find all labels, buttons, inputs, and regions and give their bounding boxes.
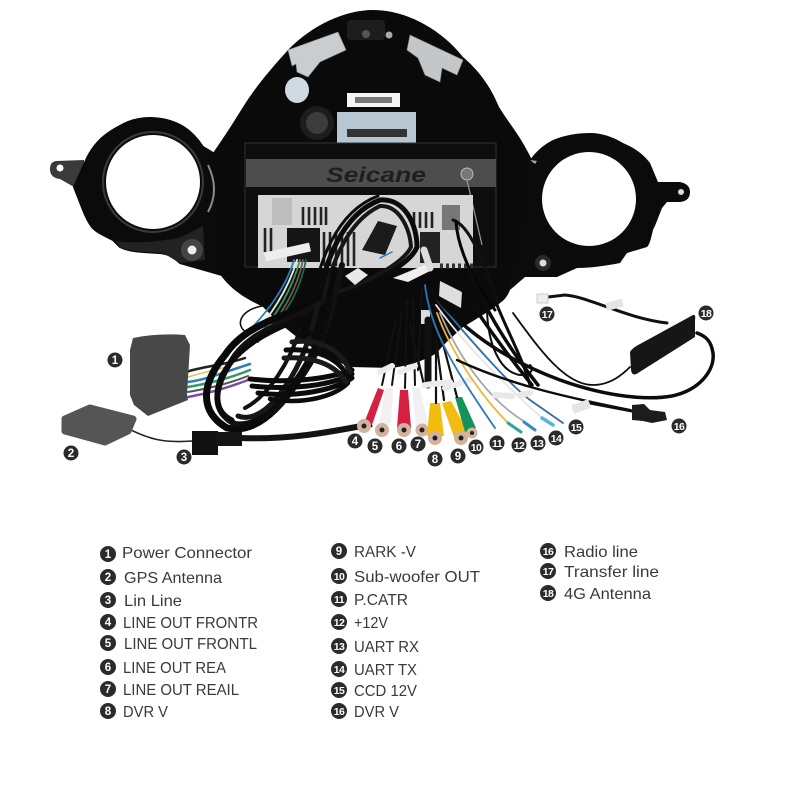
legend column 3 — [540, 543, 659, 603]
legend column 1: 2 — [105, 572, 111, 584]
coil: outer loops — [206, 270, 335, 429]
diagram number badges: 18 — [701, 308, 712, 320]
diagram number badges: 6 — [396, 441, 402, 453]
diagram number badges: 1 — [112, 355, 119, 367]
legend column 2: RARK -V — [354, 544, 416, 561]
legend column 2: 11 — [334, 594, 345, 606]
diagram number badges: 9 — [455, 451, 461, 463]
speaker — [300, 106, 334, 140]
diagram number badges: 10 — [471, 442, 482, 454]
legend column 1: Lin Line — [124, 593, 182, 610]
transparent bracket right — [407, 35, 463, 82]
legend column 1: 1 — [105, 549, 112, 561]
chassis loop bundle — [317, 200, 417, 303]
legend column 2: P.CATR — [354, 592, 408, 609]
diagram number badges: 15 — [571, 422, 582, 434]
legend column 3: Transfer line — [564, 564, 659, 581]
legend column 1: 3 — [105, 595, 111, 607]
black cables to the right — [430, 272, 713, 414]
legend column 1: LINE OUT REAIL — [123, 682, 239, 699]
GPS antenna — [65, 408, 192, 442]
legend column 2: 12 — [334, 617, 345, 629]
legend column 2: 10 — [334, 571, 345, 583]
legend column 3: 17 — [543, 566, 554, 578]
power harness — [243, 260, 294, 337]
plug — [362, 221, 397, 255]
diagram number badges: 17 — [542, 309, 553, 321]
product label — [337, 112, 416, 147]
legend column 2 — [331, 543, 480, 721]
brand: Seicane — [326, 164, 426, 187]
legend column 3: Radio line — [564, 544, 638, 561]
left lower tab — [181, 239, 203, 261]
screen panel — [245, 143, 496, 267]
diagram number badges: 2 — [68, 448, 74, 460]
legend column 1: 8 — [105, 706, 112, 718]
diagram number badges: 11 — [492, 438, 503, 450]
signal wires with coloured tips — [425, 285, 563, 432]
legend column 1: LINE OUT REA — [123, 660, 226, 677]
RCA connectors — [357, 290, 478, 445]
legend column 1: 4 — [105, 617, 112, 629]
diagram number badges: 5 — [372, 441, 379, 453]
diagram number badges: 8 — [432, 454, 439, 466]
round sticker — [285, 77, 309, 103]
right coil of wires on panel — [453, 220, 498, 303]
legend column 1: 6 — [105, 662, 111, 674]
grey band — [246, 159, 496, 187]
dome body — [205, 10, 532, 368]
legend column 1: 5 — [105, 638, 112, 650]
right gauge ring — [510, 133, 690, 290]
coil: lower horizontal band — [250, 370, 352, 381]
legend column 1: GPS Antenna — [124, 570, 222, 587]
transparent bracket left — [288, 32, 346, 77]
diagram number badges: 3 — [181, 452, 187, 464]
legend column 2: 16 — [334, 706, 345, 718]
cable bundle and coil — [186, 196, 498, 429]
legend column 1: DVR V — [123, 704, 168, 721]
legend column 3: 4G Antenna — [564, 586, 651, 603]
left mounting ear — [50, 160, 85, 187]
legend column 3: 18 — [543, 588, 554, 600]
legend column 2: UART TX — [354, 662, 417, 679]
legend column 2: +12V — [354, 615, 388, 632]
legend column 2: 13 — [334, 641, 345, 653]
white barcode label — [347, 93, 400, 107]
legend column 1 — [100, 545, 258, 721]
legend column 2: 15 — [334, 685, 345, 697]
legend column 2: CCD 12V — [354, 683, 417, 700]
legend column 2: DVR V — [354, 704, 399, 721]
top mount — [347, 20, 385, 40]
left gauge ring — [74, 118, 222, 275]
head unit back panel — [50, 10, 690, 368]
legend column 2: 14 — [334, 664, 345, 676]
legend column 1: LINE OUT FRONTR — [123, 615, 258, 632]
legend column 3: 16 — [543, 546, 554, 558]
radio connector — [632, 404, 667, 423]
diagram number badges: 7 — [415, 439, 421, 451]
legend column 1: LINE OUT FRONTL — [124, 636, 257, 653]
centre tags — [345, 268, 368, 285]
4G antenna — [630, 315, 695, 374]
foam power connector — [130, 334, 190, 416]
coil: upper band — [300, 333, 350, 368]
diagram number badges: 14 — [551, 433, 562, 445]
legend column 2: UART RX — [354, 639, 419, 656]
white wire tag left — [265, 247, 310, 257]
legend column 1: Power Connector — [122, 545, 253, 562]
transfer line — [537, 294, 667, 323]
diagram number badges: 16 — [674, 421, 685, 433]
small wire loop — [240, 306, 262, 332]
legend column 2: 9 — [336, 546, 342, 558]
lin line connector and braided cable — [192, 424, 372, 455]
diagram number badges: 12 — [514, 440, 525, 452]
legend column 1: 7 — [105, 684, 111, 696]
silver chassis — [258, 195, 473, 268]
legend column 2: Sub-woofer OUT — [354, 569, 480, 586]
diagram number badges: 13 — [533, 438, 544, 450]
diagram number badges: 4 — [352, 436, 359, 448]
diagram number badges — [64, 306, 714, 466]
